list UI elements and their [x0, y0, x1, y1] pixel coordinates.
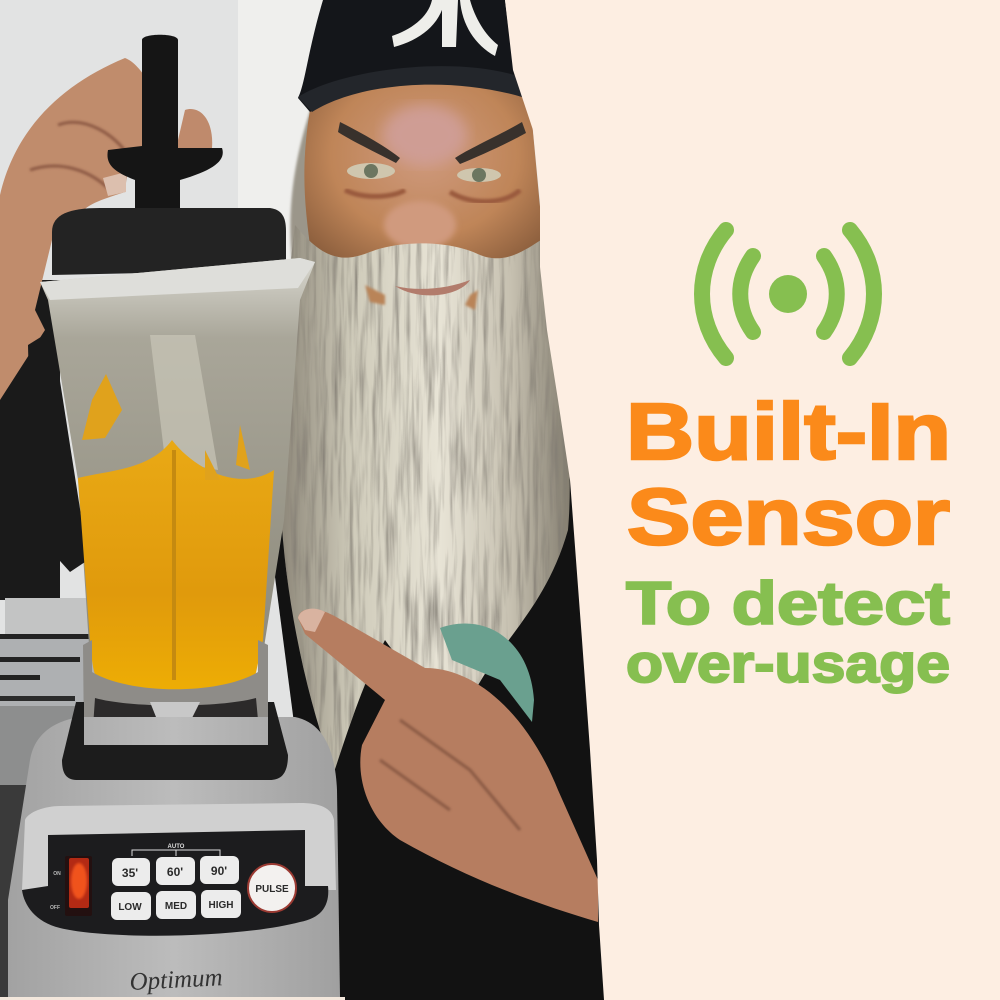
power switch: [65, 856, 92, 916]
collar inner dark: [92, 698, 260, 742]
fingernail: [298, 609, 325, 632]
control labels: ON: [53, 871, 61, 877]
plunger: [107, 35, 223, 215]
control labels: [50, 844, 289, 913]
control labels: 60': [167, 865, 183, 879]
blade reflection: [150, 335, 218, 470]
forehead highlight: [383, 105, 467, 165]
lid: [52, 208, 286, 275]
splash: [82, 374, 250, 480]
nose: [384, 201, 456, 249]
beard: [280, 225, 570, 772]
cheeks near mouth: [365, 285, 478, 310]
smoothie: [78, 440, 274, 696]
mouth: [395, 280, 470, 295]
control labels: AUTO: [168, 844, 185, 850]
cap logo: [392, 0, 498, 56]
photo: blender base: [8, 702, 340, 997]
photo: hand on blender: [0, 58, 212, 400]
clear collar: [83, 640, 268, 745]
cap brim: [298, 66, 522, 112]
face: [304, 82, 545, 290]
eyes: [347, 163, 501, 182]
blade assembly: [150, 702, 200, 740]
photo: kitchen background: [0, 0, 620, 1000]
control labels: PULSE: [255, 884, 289, 895]
pulse button: [248, 864, 296, 912]
fingernails: [103, 118, 168, 196]
control labels: OFF: [50, 905, 60, 911]
shirt logo: [440, 624, 534, 722]
heading: Built-In Sensor: [626, 387, 951, 561]
control labels: HIGH: [208, 900, 234, 911]
jar body: [40, 258, 315, 660]
handle: [28, 330, 88, 572]
buttons: [111, 856, 241, 920]
eyebrows: [338, 122, 526, 164]
subheading: To detect over-usage: [626, 570, 950, 694]
hair behind face: [290, 105, 325, 270]
peach background panel with torn edge: [505, 0, 1000, 1000]
icon: wireless sensor signal: [702, 230, 874, 358]
photo: blender jar: [28, 35, 315, 745]
heading: Built-In Sensor: Built-In: [626, 387, 951, 476]
brand name: Optimum: [129, 964, 223, 996]
photo: pointing hand: [298, 609, 598, 922]
jar centre seam: [172, 450, 176, 680]
control panel: [22, 830, 328, 936]
photo: man with black shirt: [265, 0, 640, 1000]
thumb: [178, 109, 212, 152]
control labels: 90': [211, 864, 227, 878]
light trim: [22, 803, 336, 890]
subheading: To detect over-usage: over-usage: [626, 634, 950, 694]
auto bracket: [132, 850, 220, 856]
finger creases: [30, 122, 128, 190]
heading: Built-In Sensor: Sensor: [627, 472, 950, 561]
jar rim highlight: [40, 258, 315, 300]
eye bags: [345, 190, 520, 202]
cap crown: [298, 0, 522, 112]
rubber pad: [62, 702, 288, 780]
bottom strip: [0, 997, 345, 1000]
control labels: MED: [165, 901, 187, 912]
control labels: LOW: [118, 902, 142, 913]
control labels: 35': [122, 866, 138, 880]
subheading: To detect over-usage: To detect: [626, 570, 950, 637]
knuckle creases: [380, 720, 520, 830]
